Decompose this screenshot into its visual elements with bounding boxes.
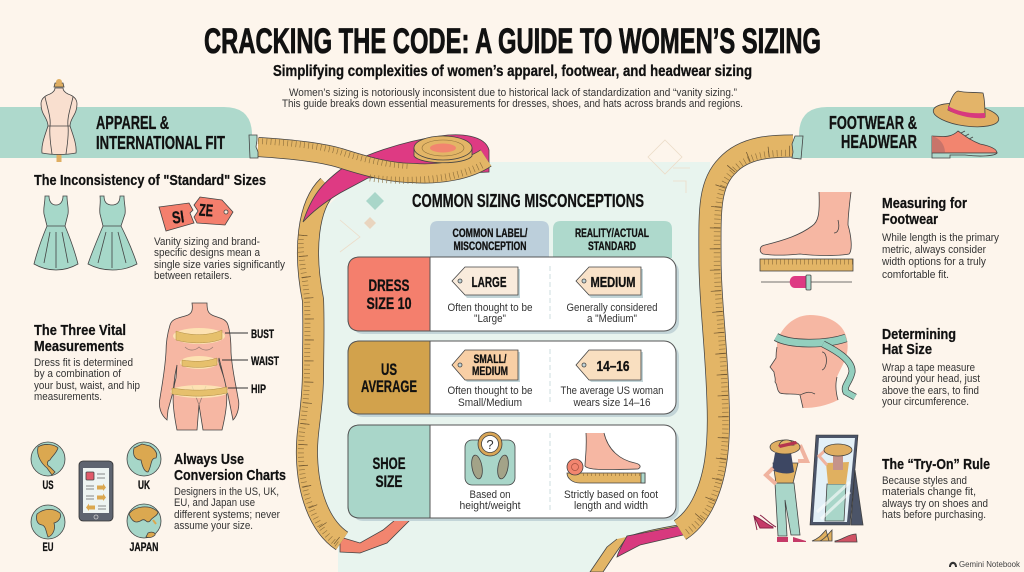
body text: by a combination of [34,368,122,380]
measuring tape: left ribbon around center panel [249,135,489,553]
heading: common sizing misconceptions: COMMON SIZING MISCONCEPTIONS [412,191,644,211]
section: three vital measurements [34,303,279,430]
misconception text: "Large" [474,313,506,325]
body text: different systems; never [174,509,280,521]
row: shoe size [348,425,679,521]
icon: globe UK [127,442,161,492]
body text: EU, and Japan use [174,497,255,509]
icon: globe Japan [127,504,161,554]
row: shoe size: SHOE [372,454,406,473]
tag: 14 to 16: 14–16 [596,358,630,375]
icon: globe Japan: JAPAN [130,540,158,554]
heading: Determining [882,326,956,343]
icon: foot on ruler [760,192,853,290]
tag: 14 to 16 [576,350,643,382]
section: try-on rule [754,435,990,542]
icon: globe US: US [42,478,54,492]
tape end cap right [792,136,803,159]
reality text: The average US woman [560,385,664,397]
icon: torn size tag [159,197,233,231]
body text [34,357,140,403]
body text [882,475,988,521]
heading [34,322,126,355]
reality text: Strictly based on foot [564,489,658,501]
body text: specific designs mean a [154,247,261,259]
banner: footwear and headwear: HEADWEAR [841,132,917,152]
row: dress size 10: DRESS [368,276,410,295]
icon: foot on tape [567,433,645,483]
body text: materials change fit, [882,486,976,498]
body text: metric, always consider [882,244,986,256]
body text: hats before purchasing. [882,509,986,521]
row: US average [348,341,679,417]
tag: large: LARGE [472,274,506,291]
heading: Always Use [174,451,244,468]
misconception text: Small/Medium [458,397,522,409]
section: determining hat size [770,315,980,408]
body text: above the ears, to find [882,385,979,397]
misconception text: Often thought to be [448,385,532,397]
body text [174,486,280,532]
row: shoe size: SIZE [376,472,402,491]
misconception text: Often thought to be [448,302,532,314]
body text: single size varies significantly [154,259,285,271]
icon: globe EU [31,505,65,554]
heading: Measurements [34,338,124,355]
intro text: This guide breaks down essential measurements for dresses, shoes, and hats across brands and regions. [282,98,743,110]
icon: torn size tag: ZE [198,201,214,220]
row: US average: AVERAGE [361,377,417,396]
misconception text [448,302,532,325]
icon: dress form mannequin [41,79,77,162]
reality text: Generally considered [566,302,658,314]
column header: reality: REALITY/ACTUAL [575,228,649,240]
body text: around your head, just [882,373,980,385]
body text: always try on shoes and [882,498,988,510]
misconception text [448,385,532,409]
row: US average: US [381,360,397,379]
icon: bathroom scale: ? [486,437,494,452]
icon: oxford shoe [932,131,997,158]
body text: Dress fit is determined [34,357,133,369]
banner: apparel and international fit: APPAREL & [96,113,169,133]
heading [882,195,967,228]
icon: globe UK: UK [138,478,150,492]
reality text: length and width [574,500,648,512]
tape end cap left [249,135,258,158]
icon: bathroom scale [465,432,515,485]
misconception text: Based on [470,489,510,501]
body text: Wrap a tape measure [882,362,975,374]
misconception text [460,489,520,512]
icon: torn size tag: SI [171,207,185,228]
column header: common label: MISCONCEPTION [454,241,526,253]
subtitle: Simplifying complexities of women’s apparel, footwear, and headwear sizing [273,63,752,80]
body text: comfortable fit. [882,269,949,281]
icon: first dress [34,196,78,270]
heading: Measuring for [882,195,967,212]
section: conversion charts [31,442,286,554]
banner: footwear and headwear: FOOTWEAR & [829,113,917,133]
tag: large [452,267,520,298]
heading [174,451,286,484]
heading: Footwear [882,211,938,228]
column header: reality [553,221,672,258]
panel: center background [305,140,710,572]
row: dress size 10 [348,257,679,334]
heading: The “Try-On” Rule [882,456,990,473]
illustration: woman at mirror [754,435,863,542]
tag: small medium: MEDIUM [472,364,508,378]
body text: measurements. [34,391,102,403]
misconception text: height/weight [460,500,520,512]
body text: Vanity sizing and brand- [154,236,260,248]
tag: small medium: SMALL/ [474,352,507,366]
icon: head with tape [770,315,855,408]
figure: torso with tape bands [159,303,248,430]
heading [882,326,956,358]
section: inconsistency of standard sizes [34,172,285,282]
reality text [564,489,658,512]
body text: Designers in the US, UK, [174,486,279,498]
watermark: Gemini Notebook: Gemini Notebook [959,559,1021,569]
column header: reality: STANDARD [588,241,636,253]
reality text: a "Medium" [587,313,637,325]
body text: Because styles and [882,475,967,487]
body text: your circumference. [882,396,969,408]
measuring tape: right ribbon [590,136,803,572]
intro text: Women’s sizing is notoriously inconsistent due to historical lack of standardization and “vanity sizing.” [289,87,737,99]
body text [882,362,980,408]
body text [154,236,285,282]
body text [881,232,999,281]
body text: While length is the primary [882,232,999,244]
heading: Hat Size [882,341,932,358]
measurement labels: WAIST [251,354,279,368]
reality text: wears size 14–16 [573,397,650,409]
reality text [566,302,658,325]
tag: medium: MEDIUM [590,274,636,291]
body text: width options for a truly [881,256,986,268]
heading: Conversion Charts [174,467,286,484]
section: measuring for footwear [760,192,999,290]
measurement labels [251,327,279,396]
reality text [560,385,664,409]
icon: globe US [31,442,65,492]
banner: apparel and international fit: INTERNATIONAL FIT [96,133,225,153]
body text: assume your size. [174,520,253,532]
icon: globe EU: EU [42,540,54,554]
icon: phone with conversion chart [79,461,113,521]
tape coil [414,136,472,163]
measurement labels: BUST [251,327,274,341]
heading: The Three Vital [34,322,126,339]
intro text [282,87,743,110]
body text: your bust, waist, and hip [34,380,140,392]
heading: The Inconsistency of "Standard" Sizes [34,172,266,189]
banner: apparel and international fit [0,107,252,158]
tag: medium [576,267,643,298]
tag: small medium [452,350,520,382]
banner: footwear and headwear [799,107,1024,158]
column header: common label [430,221,549,258]
icon: sun hat [932,91,1000,130]
measurement labels: HIP [251,382,266,396]
column header: common label: COMMON LABEL/ [452,228,528,240]
row: dress size 10: SIZE 10 [366,294,412,313]
body text: between retailers. [154,270,232,282]
icon: second dress [88,196,137,270]
